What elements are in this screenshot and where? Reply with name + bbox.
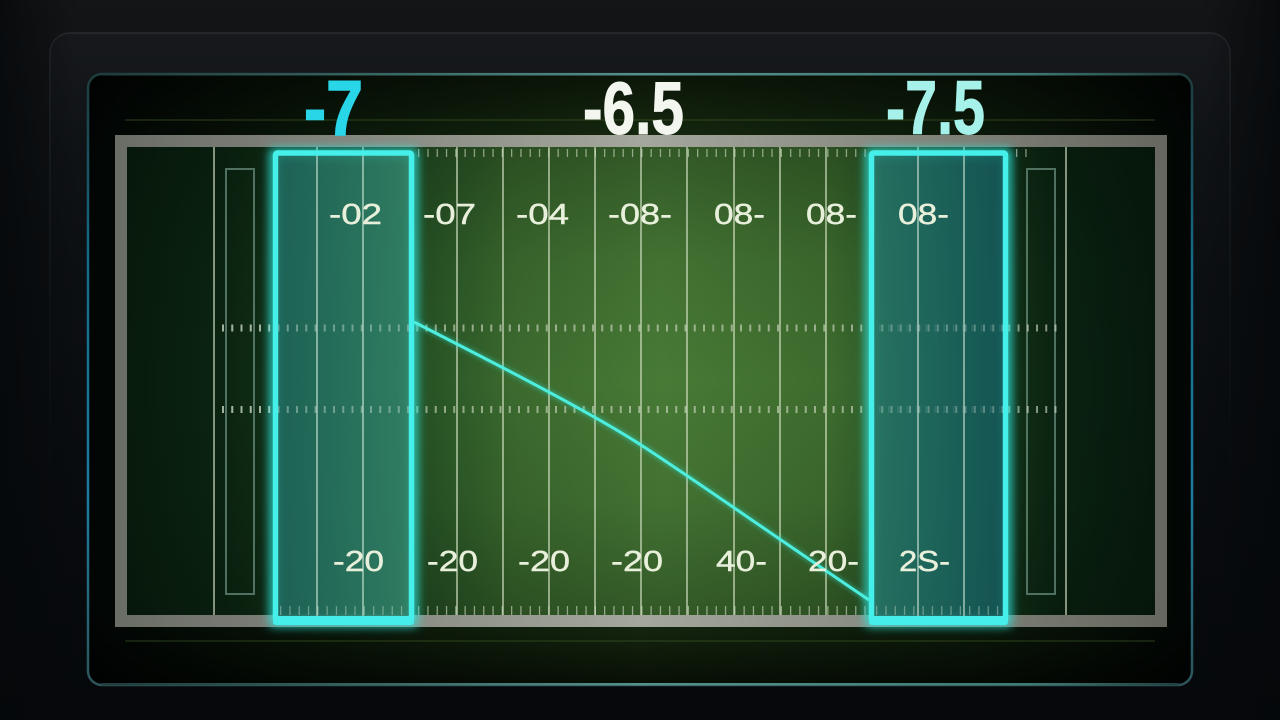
yard numbers: bottom row: -20 <box>333 546 384 578</box>
yard numbers: top row: 08- <box>806 199 857 231</box>
field border <box>121 141 1161 621</box>
highlight zone: left <box>222 153 414 625</box>
yard numbers: top row: -04 <box>516 199 569 231</box>
spread label: -7: -7 <box>304 64 363 152</box>
yard numbers: bottom row: -20 <box>611 546 663 578</box>
yard lines <box>214 147 1066 615</box>
spread label: -6.5: -6.5 <box>583 67 684 150</box>
yard numbers: top row: -08- <box>608 199 672 231</box>
yard numbers: top row: 08- <box>898 199 949 231</box>
line movement arrow <box>414 322 869 600</box>
yard numbers: bottom row: 20- <box>808 546 859 578</box>
field turf <box>121 141 1161 621</box>
yard numbers: bottom row: 2S- <box>899 546 950 578</box>
yard numbers: top row <box>329 199 949 231</box>
yard numbers: bottom row <box>333 546 950 578</box>
panel: field display <box>88 73 1192 686</box>
spread label: -7.5: -7.5 <box>886 66 985 151</box>
sideline ticks <box>418 153 1028 610</box>
yard numbers: top row: -02 <box>329 199 382 231</box>
highlight zone: right <box>869 153 1008 625</box>
yard numbers: bottom row: -20 <box>427 546 478 578</box>
yard numbers: bottom row: -20 <box>518 546 570 578</box>
hash marks <box>222 328 1060 410</box>
yard numbers: top row: 08- <box>714 199 765 231</box>
yard numbers: top row: -07 <box>423 199 476 231</box>
football field <box>121 141 1161 621</box>
end zone boxes <box>226 169 1055 594</box>
yard numbers: bottom row: 40- <box>716 546 767 578</box>
